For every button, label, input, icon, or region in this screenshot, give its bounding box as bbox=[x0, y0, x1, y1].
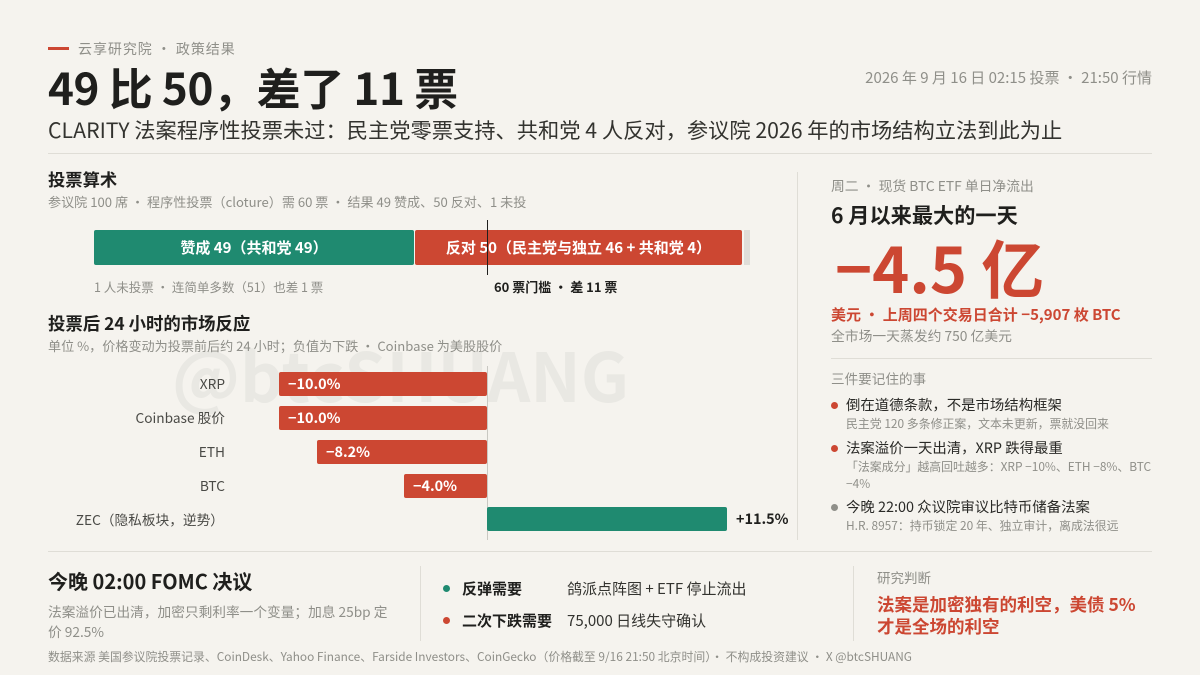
item 1: 倒在道德条款，不是市场结构框架 bbox=[846, 394, 1062, 415]
yes bar bbox=[94, 230, 414, 265]
row: ZEC: ZEC（隐私板块，逆势） bbox=[76, 509, 224, 529]
row: Coinbase bbox=[135, 406, 487, 430]
heading: 投票后 24 小时的市场反应 bbox=[48, 311, 250, 336]
header bbox=[48, 39, 1152, 145]
eyebrow: 周二 ・ 现货 BTC ETF 单日净流出 bbox=[831, 175, 1034, 195]
item 3: H.R. 8957：持币锁定 20 年、独立审计，离成法很远 bbox=[846, 517, 1119, 534]
row: Coinbase: Coinbase 股价 bbox=[135, 407, 225, 427]
panel: vote arithmetic bbox=[48, 166, 750, 296]
panel: market reaction bbox=[48, 311, 788, 540]
item 3 bbox=[831, 496, 1119, 534]
heading: 今晚 02:00 FOMC 决议 bbox=[48, 566, 252, 595]
row: XRP: XRP bbox=[200, 373, 225, 393]
item 1 bbox=[831, 394, 1109, 432]
row: ETH: −8.2% bbox=[326, 441, 370, 462]
text bbox=[48, 601, 387, 641]
red note: 美元 ・ 上周四个交易日合计 −5,907 枚 BTC bbox=[831, 304, 1121, 325]
drop label: 二次下跌需要 bbox=[462, 610, 552, 631]
watermark: @btcSHUANG bbox=[172, 325, 629, 422]
drop text: 75,000 日线失守确认 bbox=[567, 610, 706, 631]
rebound dot bbox=[443, 585, 450, 592]
note: 1 人未投票 ・ 连简单多数（51）也差 1 票 bbox=[94, 277, 323, 296]
eyebrow: 云享研究院 ・ 政策结果 bbox=[78, 39, 236, 59]
description: 单位 %，价格变动为投票前后约 24 小时；负值为下跌 ・ Coinbase 为美股股价 bbox=[48, 336, 502, 355]
panel: FOMC bbox=[48, 566, 387, 641]
footer: 数据来源 美国参议院投票记录、CoinDesk、Yahoo Finance、Farside Investors、CoinGecko（价格截至 9/16 21:50 北京时间）・ 不构成投资建议 ・ X @btcSHUANG bbox=[48, 648, 912, 665]
yes bar: 赞成 49（共和党 49） bbox=[180, 237, 328, 258]
row: Coinbase: −10.0% bbox=[288, 407, 340, 428]
row: ZEC bbox=[76, 507, 788, 531]
rebound text: 鸽派点阵图 + ETF 停止流出 bbox=[567, 578, 747, 599]
date: 2026 年 9 月 16 日 02:15 投票 ・ 21:50 行情 bbox=[865, 67, 1152, 88]
no bar: 反对 50（民主党与独立 46 + 共和党 4） bbox=[446, 237, 711, 258]
drop dot bbox=[443, 617, 450, 624]
heading: 6 月以来最大的一天 bbox=[831, 199, 1018, 230]
item 2: 「法案成分」越高回吐越多：XRP −10%、ETH −8%、BTC bbox=[846, 458, 1151, 475]
row: BTC bbox=[200, 474, 487, 498]
panel: conditions bbox=[443, 578, 747, 631]
heading: 三件要记住的事 bbox=[831, 368, 926, 388]
row: XRP bbox=[200, 372, 487, 396]
threshold line bbox=[487, 220, 488, 275]
item 2 bbox=[831, 437, 1151, 492]
big number: −4.5 亿 bbox=[835, 221, 1044, 312]
row: ZEC: +11.5% bbox=[736, 508, 788, 529]
item 2: −4% bbox=[846, 475, 870, 492]
eyebrow accent bbox=[48, 47, 69, 50]
item 3: 今晚 22:00 众议院审议比特币储备法案 bbox=[846, 496, 1090, 517]
rebound label: 反弹需要 bbox=[462, 578, 522, 599]
description: 参议院 100 席 ・ 程序性投票（cloture）需 60 票 ・ 结果 49 赞成、50 反对、1 未投 bbox=[48, 192, 526, 211]
title: 49 比 50，差了 11 票 bbox=[48, 54, 458, 118]
label: 研究判断 bbox=[877, 567, 931, 587]
row: BTC: BTC bbox=[200, 475, 225, 495]
row: XRP: −10.0% bbox=[288, 373, 340, 394]
gray note: 全市场一天蒸发约 750 亿美元 bbox=[831, 325, 1012, 345]
threshold label: 60 票门槛 · 差 11 票 bbox=[494, 277, 617, 296]
no bar bbox=[415, 230, 742, 265]
verdict bbox=[877, 592, 1136, 639]
item 2: 法案溢价一天出清，XRP 跌得最重 bbox=[846, 437, 1063, 458]
panel: research view bbox=[877, 567, 1136, 639]
row: ETH: ETH bbox=[199, 441, 225, 461]
axis bbox=[487, 366, 488, 540]
verdict: 法案是加密独有的利空，美债 5% bbox=[877, 592, 1136, 617]
heading: 投票算术 bbox=[48, 166, 117, 191]
item 1: 民主党 120 多条修正案，文本未更新，票就没回来 bbox=[846, 415, 1109, 432]
verdict: 才是全场的利空 bbox=[877, 614, 1000, 639]
subtitle: CLARITY 法案程序性投票未过：民主党零票支持、共和党 4 人反对，参议院 2026 年的市场结构立法到此为止 bbox=[48, 114, 1062, 145]
row: BTC: −4.0% bbox=[413, 475, 457, 496]
text: 法案溢价已出清，加密只剩利率一个变量；加息 25bp 定 bbox=[48, 601, 387, 621]
panel: ETF outflow bbox=[831, 175, 1121, 345]
text: 价 92.5% bbox=[48, 621, 104, 641]
not voting bar bbox=[744, 230, 750, 265]
row: ETH bbox=[199, 440, 487, 464]
panel: three things bbox=[831, 368, 1151, 534]
